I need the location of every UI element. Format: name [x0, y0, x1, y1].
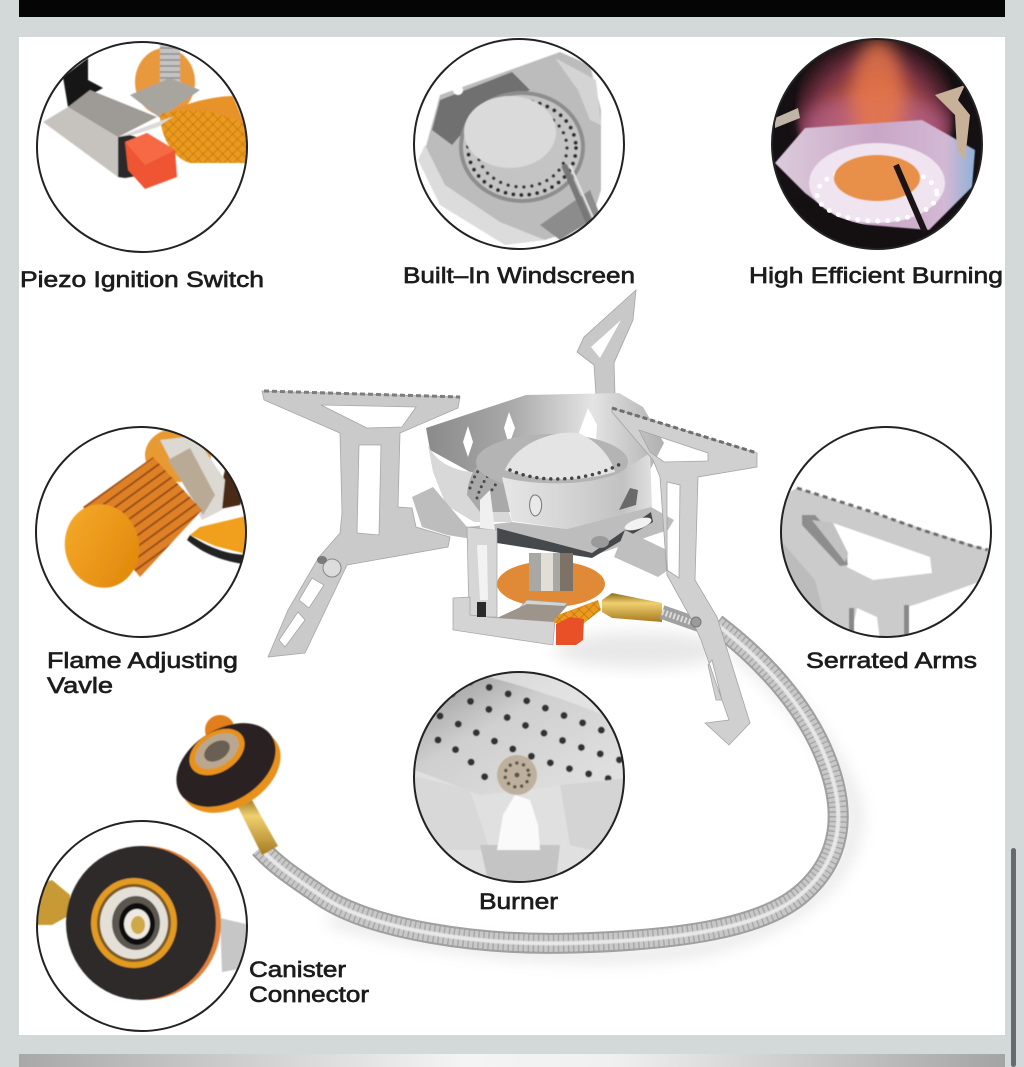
burner head	[467, 433, 628, 512]
label: Flame Adjusting	[47, 648, 238, 673]
panel: serrated arms	[775, 427, 991, 673]
detail photo: windscreen and burner	[418, 52, 601, 245]
detail photo: burner head	[415, 673, 623, 881]
windscreen back wall	[426, 393, 664, 482]
left arm serration	[264, 391, 460, 397]
panel: canister connector	[36, 821, 369, 1031]
rubber disc	[161, 706, 291, 824]
stem front	[529, 553, 573, 591]
circle outline	[414, 672, 624, 882]
circle outline	[36, 427, 246, 637]
orange regulator disc	[497, 561, 605, 607]
panel: built-in windscreen	[403, 39, 635, 288]
label: Burner	[479, 889, 558, 914]
label: Serrated Arms	[806, 648, 977, 673]
hose shadow	[330, 650, 855, 955]
label: Built–In Windscreen	[403, 263, 635, 288]
left outer wall	[428, 445, 512, 522]
right support arm	[612, 408, 757, 745]
detail photo: connector	[36, 846, 250, 1000]
right arm hinge	[691, 617, 701, 627]
circle outline	[414, 39, 624, 249]
label second line: Connector	[249, 982, 369, 1007]
adapter orange rim	[166, 712, 296, 830]
canister adapter	[161, 706, 296, 855]
label: High Efficient Burning	[749, 263, 1003, 288]
knurled knob	[553, 600, 601, 630]
right arm serration	[612, 408, 757, 453]
rear arm hole	[591, 320, 621, 358]
front vent holes	[530, 495, 542, 516]
circle outline	[37, 821, 247, 1031]
braided hose	[260, 624, 838, 943]
label: Canister	[249, 957, 346, 982]
detail photo: ignition switch	[43, 42, 250, 189]
windscreen front wall	[502, 453, 652, 529]
circle outline	[781, 427, 991, 637]
main product: camping stove	[260, 290, 855, 955]
orange valve tab	[205, 715, 235, 745]
dark plate edge	[497, 512, 653, 558]
windscreen vents	[463, 408, 597, 457]
threaded ring	[181, 719, 253, 785]
circle outline	[772, 39, 982, 249]
lower right strut	[614, 530, 668, 577]
hose stub	[662, 612, 702, 626]
panel: piezo ignition switch	[20, 42, 264, 292]
left arm hinge rivet	[317, 556, 341, 577]
left support arm	[262, 391, 460, 657]
detail photo: valve knob	[64, 430, 245, 589]
panel: high efficient burning	[749, 15, 1003, 288]
stove shadow	[555, 632, 725, 668]
panel: flame adjusting valve	[36, 427, 250, 698]
label: Piezo Ignition Switch	[20, 267, 264, 292]
bottom gradient strip	[19, 1054, 1005, 1067]
panel: burner	[410, 668, 630, 914]
brass connector	[232, 795, 278, 855]
rear support arm	[577, 290, 636, 395]
brass fitting	[602, 593, 662, 622]
detail photo: flame	[773, 40, 981, 248]
burner box	[453, 597, 567, 645]
red ignition button	[556, 617, 584, 645]
circle outline	[37, 42, 247, 252]
scrollbar	[1011, 848, 1016, 1067]
detail photo: serrated arm	[775, 488, 990, 640]
top black bar	[19, 0, 1005, 17]
front bracket	[467, 490, 497, 617]
base plate	[412, 487, 674, 556]
label second line: Vavle	[47, 673, 113, 698]
